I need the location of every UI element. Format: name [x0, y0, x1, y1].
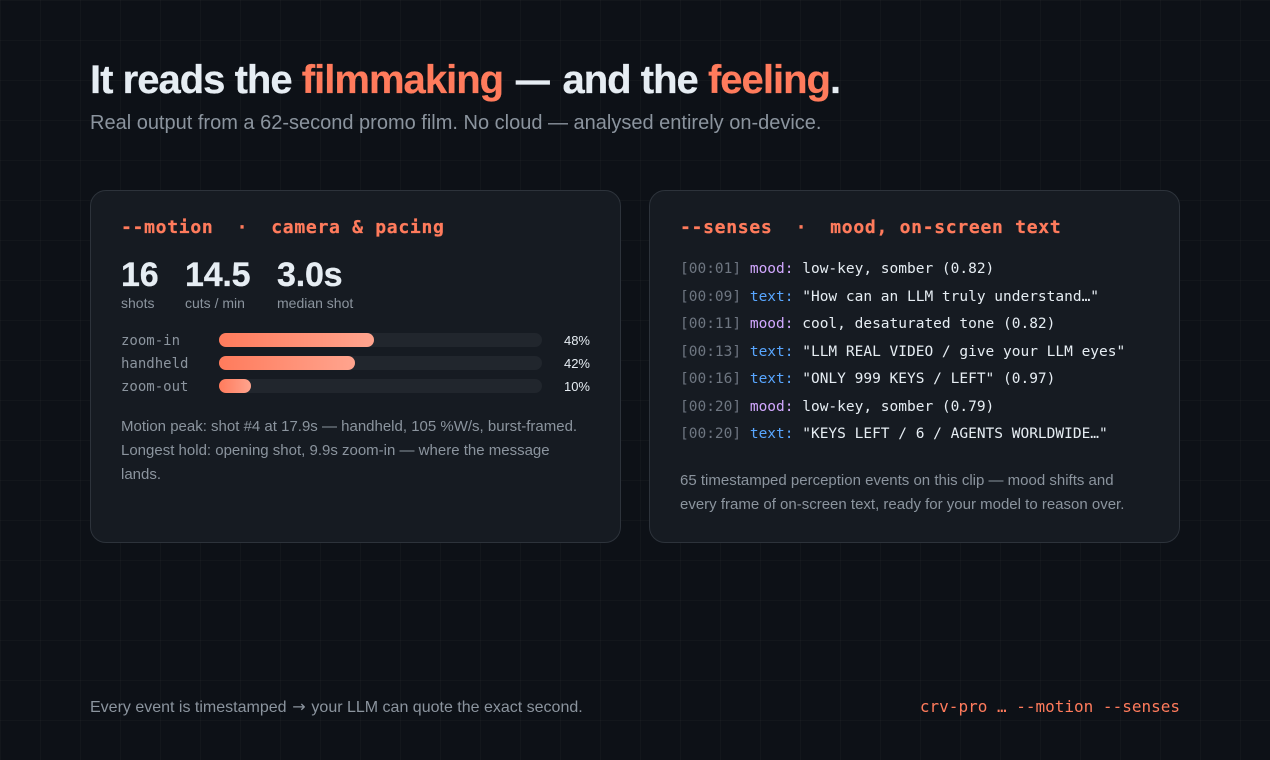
footer note: Every event is timestamped your LLM can quote the exact second. — [90, 699, 583, 716]
footer note: → — [292, 697, 306, 716]
senses notes: every frame of on-screen text, ready for your model to reason over. — [680, 496, 1124, 513]
bar label: zoom-in: zoom-in — [121, 333, 180, 349]
panel: motion — [90, 190, 621, 543]
stat label: cuts per minute: cuts / min — [185, 295, 245, 311]
motion notes: Motion peak: shot #4 at 17.9s — handheld, 105 %W/s, burst-framed. — [121, 418, 577, 435]
bar label: zoom-out: zoom-out — [121, 379, 188, 395]
motion notes: Longest hold: opening shot, 9.9s zoom-in — where the message — [121, 442, 550, 459]
stat label: median shot: median shot — [277, 295, 353, 311]
footer command: crv-pro … --motion --senses — [920, 697, 1180, 716]
bar: zoom-out — [219, 379, 542, 393]
event log: [00:01] mood: low-key, somber (0.82) [00:09] text: "How can an LLM truly understand…" [00:11] mood: cool, desaturated tone (0.82) [00:13] text: "LLM REAL VIDEO / give your LLM eyes" [00:16] text: "ONLY 999 KEYS / LEFT" (0.97) [00:20] mood: low-key, somber (0.79) [00:20] text: "KEYS LEFT / 6 / AGENTS WORLDWIDE…" — [680, 261, 1125, 442]
panel: senses — [649, 190, 1180, 543]
bar value: zoom-out: 10% — [564, 379, 590, 394]
motion notes — [121, 418, 577, 483]
senses panel heading: --senses · mood, on-screen text — [680, 217, 1061, 238]
senses notes — [680, 472, 1124, 513]
bar: handheld — [219, 356, 542, 370]
title: It reads the filmmaking and the feeling. — [90, 58, 840, 102]
motion panel heading: --motion · camera & pacing — [121, 217, 445, 238]
subtitle: Real output from a 62-second promo film. No cloud — analysed entirely on-device. — [90, 112, 821, 134]
motion notes: lands. — [121, 466, 161, 483]
stat: median shot: 3.0s — [277, 256, 342, 294]
senses notes: 65 timestamped perception events on this clip — mood shifts and — [680, 472, 1114, 489]
bar value: handheld: 42% — [564, 356, 590, 371]
title: — — [516, 58, 549, 102]
stat: shots: 16 — [121, 256, 158, 294]
bar value: zoom-in: 48% — [564, 333, 590, 348]
bar: zoom-in — [219, 333, 542, 347]
stat: cuts per minute: 14.5 — [185, 256, 250, 294]
stat label: shots: shots — [121, 295, 154, 311]
bar label: handheld: handheld — [121, 356, 188, 372]
